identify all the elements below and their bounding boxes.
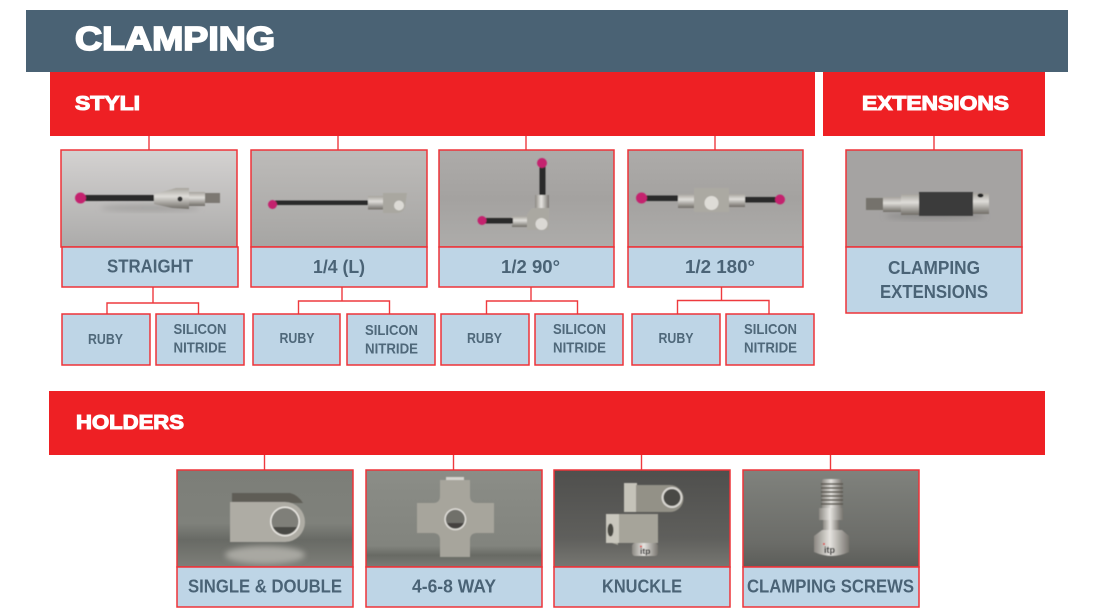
panel: straight stylus (61, 150, 244, 365)
option: silicon nitride: NITRIDE (365, 340, 418, 358)
panel: 1/4 (L) stylus (251, 150, 435, 365)
panel: knuckle holder (554, 470, 730, 607)
label: clamping screws: CLAMPING SCREWS (747, 576, 914, 596)
label: 1/2 180°: 1/2 180° (685, 256, 755, 277)
panel: 1/2 90 stylus (439, 150, 623, 365)
option: ruby: RUBY (88, 331, 123, 348)
option: ruby (62, 314, 150, 365)
panel: clamping extensions (846, 150, 1022, 313)
label: 4-6-8 way (366, 567, 542, 607)
extensions header: EXTENSIONS (862, 93, 1009, 115)
option: silicon nitride: NITRIDE (553, 340, 606, 356)
label: clamping extensions: CLAMPING (888, 257, 980, 278)
label: 1/4 (L): 1/4 (L) (313, 256, 365, 277)
label: 4-6-8 way: 4-6-8 WAY (412, 576, 497, 596)
panel: clamping screws (743, 470, 919, 607)
option: silicon nitride: NITRIDE (744, 340, 797, 356)
label: clamping extensions (846, 247, 1022, 313)
extensions header (823, 72, 1045, 136)
option: silicon nitride (726, 314, 814, 365)
option: ruby: RUBY (280, 330, 314, 347)
label: clamping screws (743, 567, 919, 607)
option: silicon nitride: SILICON (553, 321, 606, 338)
option: silicon nitride: SILICON (744, 321, 797, 338)
panel: single and double holder (177, 470, 353, 607)
photo: cross holder (366, 470, 542, 567)
photo: 1/4 L stylus (251, 150, 427, 247)
panel: 1/2 180 stylus (628, 150, 814, 365)
photo: knuckle (554, 470, 730, 567)
label: 1/4 (L) (251, 247, 427, 287)
option: ruby (253, 314, 340, 365)
label: straight (62, 247, 238, 287)
option: silicon nitride (535, 314, 623, 365)
label: 1/2 90° (439, 247, 614, 287)
styli header (50, 72, 815, 136)
option: ruby: RUBY (658, 330, 694, 347)
option: ruby: RUBY (467, 330, 502, 347)
photo: 1/2 180 stylus (628, 150, 803, 247)
option: silicon nitride (156, 314, 244, 365)
holders header (49, 391, 1045, 455)
option: silicon nitride: NITRIDE (174, 340, 226, 356)
holders header: HOLDERS (76, 412, 184, 434)
option: ruby (441, 314, 529, 365)
option: silicon nitride: SILICON (174, 321, 226, 338)
connector lines (107, 136, 934, 470)
label: 1/2 180° (628, 247, 803, 287)
label: 1/2 90°: 1/2 90° (501, 256, 560, 277)
title: clamping: CLAMPING (75, 20, 275, 57)
title bar (26, 10, 1068, 72)
photo: clamping screw: itp (824, 545, 835, 555)
photo: single holder (177, 470, 353, 567)
option: silicon nitride (347, 314, 435, 365)
option: ruby (632, 314, 720, 365)
label: clamping extensions: EXTENSIONS (880, 281, 988, 302)
photo: 1/2 90 stylus (439, 150, 614, 247)
option: silicon nitride: SILICON (365, 322, 418, 339)
photo: clamping extension (846, 150, 1022, 247)
label: knuckle (554, 567, 730, 607)
photo: straight stylus (61, 150, 237, 247)
panel: 4-6-8 way holder (366, 470, 542, 607)
label: straight: STRAIGHT (107, 256, 194, 276)
label: single & double: SINGLE & DOUBLE (188, 576, 342, 596)
photo: knuckle: itp (640, 546, 650, 556)
label: knuckle: KNUCKLE (602, 576, 682, 596)
styli header: STYLI (75, 93, 140, 115)
label: single & double (177, 567, 353, 607)
photo: clamping screw (743, 470, 919, 567)
